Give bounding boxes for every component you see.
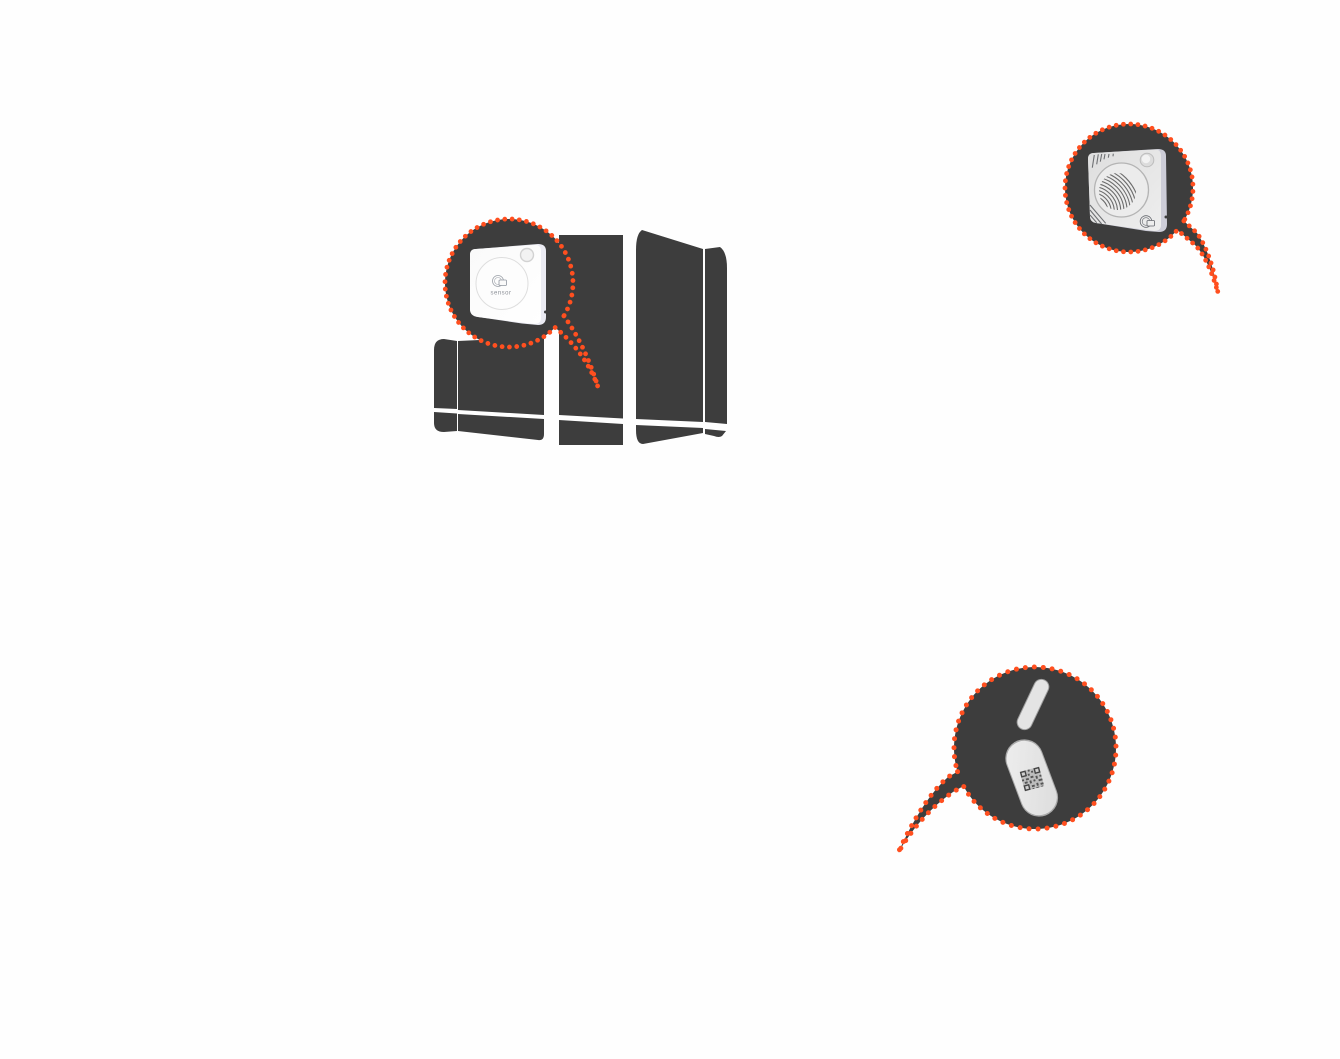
callout bubble 3 [898, 667, 1116, 853]
callout bubble 2 [1065, 124, 1218, 293]
callout: door contact sensor [898, 667, 1116, 853]
building silhouette [434, 230, 727, 445]
callout: wall sensor back [1044, 124, 1218, 293]
icon: white sensor device [470, 244, 547, 325]
infographic canvas [434, 122, 1220, 853]
callout: wall sensor front [445, 219, 598, 387]
icon: white sensor device: sensor [490, 290, 512, 296]
callout bubble 1 [445, 219, 598, 387]
icon: QR code [1020, 767, 1044, 791]
icon: grey sensor back [1088, 149, 1167, 232]
icon: magnet pill [1014, 676, 1052, 733]
icon: sensor pill [1000, 734, 1064, 822]
